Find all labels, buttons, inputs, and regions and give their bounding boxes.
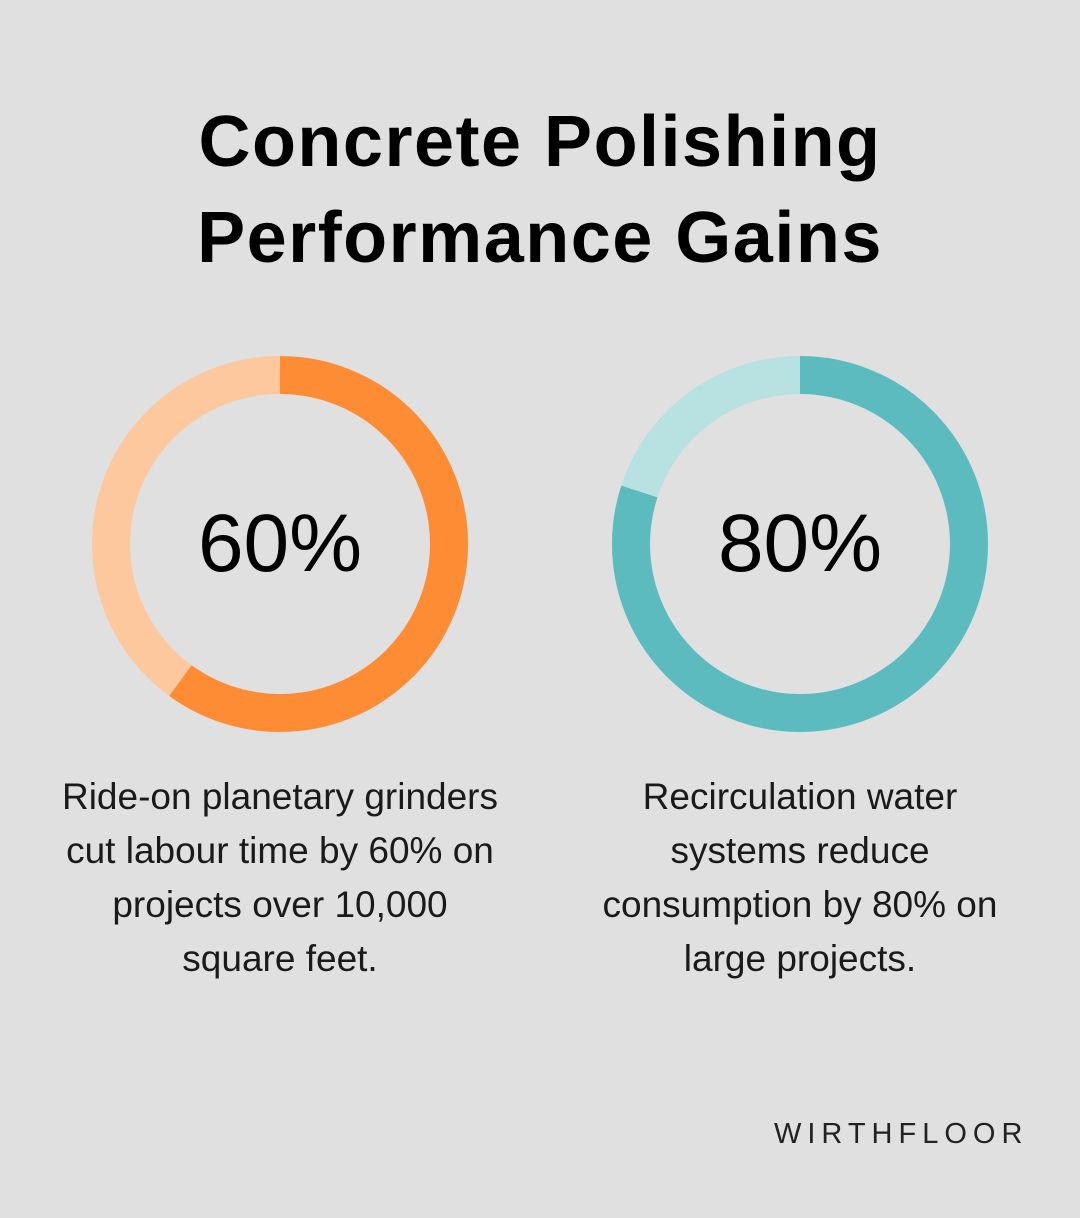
title: Performance Gains [197, 198, 883, 278]
text: water: systems reduce [670, 830, 930, 871]
logo: WIRTHFLOOR [774, 1118, 1028, 1150]
text: grinders: Ride-on planetary grinders [62, 776, 498, 817]
number: 80%: 80% [718, 498, 882, 589]
text: grinders: square feet. [182, 938, 378, 979]
text: water [603, 776, 997, 979]
donut: 80% [612, 356, 988, 732]
text: grinders [62, 776, 498, 979]
text: grinders: projects over 10,000 [112, 884, 448, 925]
text: water: Recirculation water [643, 776, 957, 817]
text: grinders: cut labour time by 60% on [66, 830, 494, 871]
title [197, 102, 883, 278]
text: water: consumption by 80% on [603, 884, 997, 925]
number: 60%: 60% [198, 498, 362, 589]
text: water: large projects. [684, 938, 916, 979]
title: Concrete Polishing [198, 102, 882, 182]
donut: 60% [92, 356, 468, 732]
